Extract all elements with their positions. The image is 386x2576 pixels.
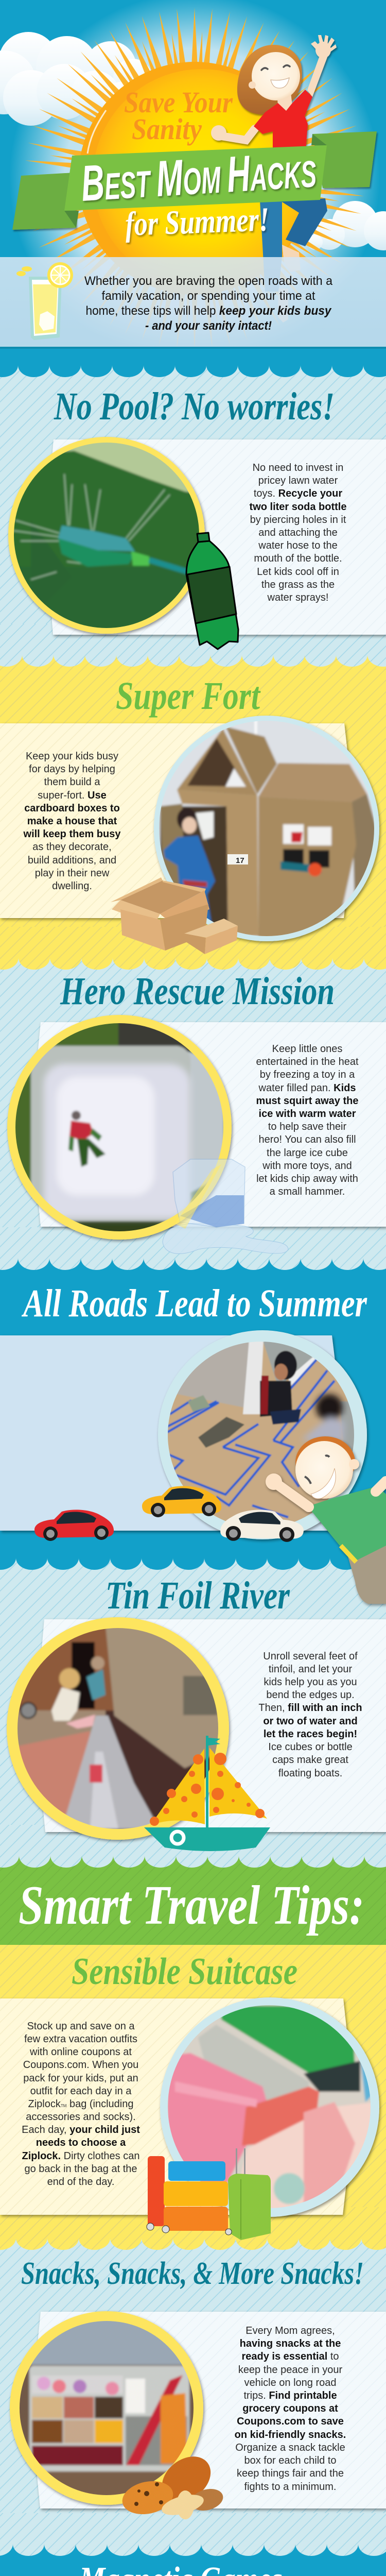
text: no pool: water sprays! (267, 592, 328, 603)
outstretched arm and fist (211, 125, 255, 141)
text: super fort: for days by helping (29, 764, 115, 775)
text: no pool: by piercing holes in it (250, 514, 346, 526)
text: sensible suitcase (22, 2021, 140, 2188)
text: snacks: keep things fair and the (237, 2468, 344, 2479)
photo: tape roads (158, 1330, 367, 1539)
icon: ice cube (163, 1159, 288, 1253)
text: no pool: Let kids cool off in (257, 566, 339, 578)
boy shirt trim (341, 1546, 356, 1562)
text: super fort: super-fort. Use (38, 790, 107, 801)
background: smart travel tips green band (0, 1850, 386, 1945)
background: pool section light blue (0, 363, 386, 667)
ribbon back right (312, 131, 377, 188)
photo: tin foil river (7, 1617, 229, 1840)
text: sensible suitcase: Stock up and save on a (27, 2021, 135, 2032)
text: hero rescue (256, 1043, 359, 1197)
text: tin foil: floating boats. (278, 1768, 342, 1779)
yellow suitcase (164, 2181, 228, 2206)
text: hero rescue: Keep little ones (272, 1043, 342, 1055)
illustration: happy boy (266, 1436, 386, 1604)
peanut (160, 2490, 206, 2519)
text: snacks: Coupons.com to save (237, 2416, 344, 2427)
background: fort section yellow (0, 654, 386, 970)
orange suitcase (162, 2207, 228, 2233)
text: sensible suitcase: with online coupons at (29, 2046, 132, 2058)
ribbon folds (64, 134, 327, 228)
text: snacks: trips. Find printable (243, 2390, 337, 2401)
text: tin foil: kids help you as you (264, 1676, 357, 1688)
text: no pool (250, 462, 346, 603)
green suitcase (225, 2148, 271, 2240)
eyes (261, 65, 290, 70)
face (252, 52, 300, 100)
title: save your sanity: Save Your (124, 86, 233, 119)
photo: packed clothes (160, 1997, 379, 2217)
text: sensible suitcase: Ziplock. Dirty clothes can (22, 2150, 139, 2162)
text: super fort: will keep them busy (23, 828, 121, 840)
text: sensible suitcase: end of the day. (47, 2176, 114, 2188)
text: no pool: the grass as the (261, 579, 335, 590)
background: suitcase section yellow (0, 1942, 386, 2250)
text: no pool: mouth of the bottle. (254, 553, 342, 564)
text: tin foil: let the races begin! (264, 1728, 357, 1740)
text: hero rescue: by freezing a toy in a (260, 1069, 355, 1080)
almond (188, 2485, 225, 2514)
hull (144, 1827, 270, 1851)
background: sky and blue band (0, 0, 386, 377)
text: hero rescue: ice with warm water (259, 1108, 356, 1120)
panel: sensible suitcase (0, 1998, 355, 2215)
smile (271, 78, 289, 88)
heading: sensible suitcase: Sensible Suitcase (72, 1951, 297, 1993)
text: snacks: fights to a minimum. (244, 2481, 336, 2493)
text: sensible suitcase: accessories and socks). (26, 2111, 136, 2123)
panel: hero rescue (31, 1022, 386, 1227)
text: snacks: grocery coupons at (242, 2403, 338, 2414)
icon: lemonade glass (16, 262, 73, 340)
text: tin foil (258, 1651, 362, 1779)
icon: cookies and nuts (119, 2447, 225, 2519)
title: best mom hacks: BEST MOM HACKS (80, 141, 318, 212)
cloud right (307, 201, 386, 250)
left sail (150, 1749, 205, 1826)
text: tin foil: tinfoil, and let your (269, 1664, 352, 1675)
text: tin foil: Unroll several feet of (263, 1651, 358, 1662)
raised arm and hand (307, 35, 337, 97)
text: snacks: box for each child to (244, 2455, 337, 2466)
intro text (84, 274, 333, 333)
mom legs (260, 198, 327, 323)
brown cookie (153, 2447, 219, 2511)
icon: sailboat (144, 1736, 270, 1851)
text: hero rescue: must squirt away the (256, 1095, 358, 1107)
text: snacks (235, 2325, 346, 2493)
boy arms (278, 1481, 386, 1507)
photo: bottle sprinkler (8, 437, 206, 634)
panel: no pool (45, 439, 386, 635)
text: hero rescue: entertained in the heat (256, 1056, 359, 1067)
panel: all roads (0, 1335, 344, 1531)
icon: suitcases (147, 2148, 271, 2240)
mom upper body (211, 35, 337, 149)
text: no pool: No need to invest in (253, 462, 343, 473)
text: super fort: make a house that (27, 816, 117, 827)
mast and flag (206, 1736, 220, 1827)
text: sensible suitcase: outfit for each day in a (30, 2086, 132, 2097)
panel: snacks (31, 2312, 386, 2509)
text: super fort: dwelling. (52, 880, 92, 892)
text: super fort: build additions, and (28, 855, 116, 866)
text: no pool: water hose to the (258, 540, 338, 551)
background: hero section light blue (0, 956, 386, 1270)
text: hero rescue: to help save their (268, 1121, 346, 1132)
blue band shadow (0, 347, 386, 349)
text: super fort: them build a (44, 776, 100, 788)
title: save your sanity: Sanity (132, 112, 202, 146)
text: hero rescue: water filled pan. Kids (258, 1082, 356, 1094)
ribbon back left (12, 173, 76, 230)
chocolate chip cookie (119, 2477, 176, 2519)
panel: super fort (0, 723, 355, 918)
text: sensible suitcase: ZiplockTM bag (including (28, 2098, 134, 2110)
title: for summer: for Summer! (125, 200, 270, 243)
text: sensible suitcase: go back in the bag at the (24, 2163, 137, 2175)
hair (237, 45, 302, 114)
door number tag (227, 854, 248, 865)
text: super fort: play in their new (35, 868, 110, 879)
background: roads section blue (0, 1257, 386, 1570)
text: snacks: Organize a snack tackle (235, 2442, 345, 2453)
text: sensible suitcase: few extra vacation outfits (24, 2033, 137, 2045)
hero illustration (0, 0, 386, 364)
text: no pool: pricey lawn water (258, 475, 338, 486)
boy legs (345, 1540, 386, 1604)
text: snacks: vehicle on long road (244, 2377, 337, 2388)
text: snacks: on kid-friendly snacks. (235, 2429, 346, 2441)
text: tin foil: bend the edges up. (266, 1689, 355, 1701)
icon: white car (220, 1510, 304, 1542)
text: snacks: ready is essential to (241, 2351, 339, 2362)
neck (277, 95, 293, 111)
text: hero rescue: a small hammer. (270, 1186, 345, 1197)
text: tin foil: or two of water and (263, 1716, 358, 1727)
photo: cardboard fort (154, 716, 381, 943)
intro text: home, these tips will help keep your kids busy (85, 304, 332, 318)
icon: red car (34, 1510, 114, 1541)
intro text: family vacation, or spending your time at (102, 289, 315, 303)
background: snacks section light blue (0, 2236, 386, 2556)
blue suitcase (168, 2161, 225, 2181)
right sail (209, 1748, 267, 1819)
text: hero rescue: the large ice cube (267, 1147, 348, 1159)
text: super fort: as they decorate, (32, 841, 112, 853)
sun rays (24, 8, 365, 349)
text: snacks: keep the peace in your (238, 2364, 343, 2376)
ribbon main (64, 145, 327, 211)
text: no pool: two liter soda bottle (250, 501, 346, 513)
panel: tin foil (35, 1619, 386, 1832)
sky glow (9, 0, 380, 364)
intro text: Whether you are braving the open roads with a (84, 274, 333, 288)
text: super fort: Keep your kids busy (26, 751, 118, 762)
background: magnetic section blue (0, 2540, 386, 2576)
icon: yellow car (142, 1486, 221, 1517)
text: no pool: toys. Recycle your (254, 488, 342, 499)
title: save your sanity (124, 86, 233, 146)
sun disc (78, 62, 311, 295)
intro text: - and your sanity intact! (145, 319, 272, 333)
text: sensible suitcase: needs to choose a (36, 2137, 126, 2148)
red suitcase (147, 2156, 165, 2230)
ear (249, 81, 256, 89)
text: hero rescue: let kids chip away with (256, 1173, 358, 1184)
text: super fort (23, 751, 121, 892)
cloud left (0, 32, 152, 126)
text: tin foil: Ice cubes or bottle (268, 1741, 353, 1753)
text: tin foil: Then, fill with an inch (258, 1702, 362, 1714)
text: sensible suitcase: Coupons.com. When you (23, 2059, 138, 2071)
text: tin foil: caps make great (272, 1754, 348, 1766)
photo: frozen toy (7, 1015, 232, 1240)
text: sensible suitcase: Each day, your child just (22, 2124, 140, 2136)
shirt (254, 90, 312, 149)
heading: super fort: Super Fort (116, 674, 261, 718)
text: snacks: Every Mom agrees, (245, 2325, 335, 2336)
text: no pool: and attaching the (258, 527, 338, 538)
boy fist (266, 1473, 282, 1490)
boy shirt (308, 1486, 386, 1561)
background: tin foil section light blue (0, 1556, 386, 1868)
text: super fort: cardboard boxes to (24, 803, 120, 814)
intro panel (0, 257, 386, 347)
boy head (295, 1436, 359, 1499)
photo: snack tackle box (10, 2311, 203, 2505)
heading: tin foil river: Tin Foil River (106, 1574, 290, 1617)
lifebuoy (171, 1832, 184, 1844)
icon: soda bottle (186, 533, 238, 649)
text: hero rescue: with more toys, and (262, 1160, 352, 1172)
icon: cardboard boxes (111, 877, 238, 954)
door number tag: 17 (236, 856, 244, 865)
text: sensible suitcase: pack for your kids, put an (23, 2073, 138, 2084)
text: hero rescue: hero! You can also fill (258, 1134, 356, 1145)
text: snacks: having snacks at the (240, 2338, 341, 2349)
